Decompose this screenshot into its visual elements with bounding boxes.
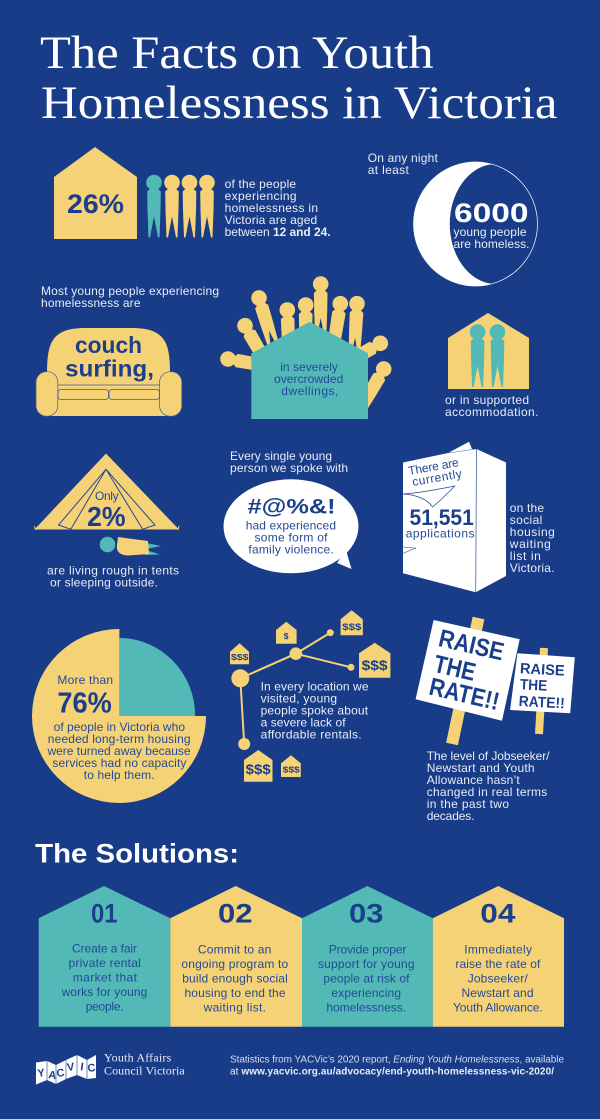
icon: four young people	[146, 175, 215, 238]
text: waiting list: social	[510, 513, 542, 527]
text: supported accommodation	[445, 393, 538, 419]
text: most young people intro: homelessness are	[41, 296, 141, 310]
panel: solution 02: Commit to an	[198, 942, 271, 956]
panel: solution 04: Immediately	[464, 942, 532, 956]
panel: solution 03: support for young	[318, 957, 414, 971]
pie chart: 76 percent turned away: More than	[57, 673, 113, 687]
text: age group: of the people	[225, 177, 296, 191]
text: age group: experiencing	[225, 189, 297, 203]
icon: small house $$$ bottom	[281, 755, 301, 777]
title: The Facts on Youth	[40, 27, 433, 79]
text: every young person: Every single young	[230, 449, 332, 463]
text: 6000 young people: are homeless.	[454, 237, 530, 251]
panel: solution 02: build enough social	[182, 971, 288, 985]
text: waiting list: waiting	[509, 537, 551, 551]
icon: overcrowded house with people	[219, 276, 394, 421]
text: waiting list: Victoria.	[510, 561, 554, 575]
text: jobseeker level: decades.	[427, 809, 474, 823]
icon: couch surfing sofa: couch	[75, 332, 142, 358]
icon: small protest sign: RAISE	[519, 660, 565, 680]
panel: solution 03: 03	[349, 899, 384, 929]
panel: supported accommodation	[445, 313, 538, 419]
icon: tent: Only	[95, 489, 119, 503]
icon: overcrowded house with people: dwellings,	[281, 384, 338, 398]
text: living rough: are living rough in tents	[47, 564, 179, 578]
text: age group: between 12 and 24.	[225, 225, 331, 239]
panel: solution 01: market that	[73, 970, 138, 984]
panel: solution 04: 04	[480, 899, 516, 929]
icon: speech bubble: #@%&!	[248, 496, 336, 518]
logo: YACVic: C	[87, 1062, 96, 1075]
title	[40, 27, 558, 129]
title: Homelessness in Victoria	[41, 77, 558, 129]
panel: solution 02: housing to end the	[184, 986, 286, 1000]
text: every location: affordable rentals.	[261, 728, 362, 742]
icon: speech bubble: had experienced	[246, 518, 336, 532]
panel: solution 02: ongoing program to	[181, 957, 289, 971]
panel: solution 01: people.	[86, 1000, 124, 1014]
icon: overcrowded house with people: in severely	[280, 360, 338, 374]
heading: the solutions: The Solutions:	[35, 838, 239, 868]
icon: application booklet: There are	[407, 455, 460, 478]
panel: family violence	[224, 449, 358, 573]
panel: solution 01: works for young	[61, 985, 147, 999]
icon: application booklet	[402, 442, 506, 592]
text: statistics source: at www.yacvic.org.au/advocacy/end-youth-homelessness-vic-2020/	[230, 1066, 554, 1078]
text: supported accommodation: accommodation.	[445, 405, 538, 419]
icon: large protest sign: RATE!!	[427, 673, 502, 716]
text: living rough	[47, 564, 179, 590]
text: age group: homelessness in	[225, 201, 318, 215]
text: 6000 young people: young people	[454, 225, 527, 239]
logo: YACVic: Council Victoria	[104, 1064, 185, 1078]
text: waiting list: list in	[510, 549, 541, 563]
text: jobseeker level: changed in real terms	[427, 785, 547, 799]
text: statistics source: Statistics from YACVic’s 2020 report, Ending Youth Homelessness, available	[230, 1054, 564, 1066]
icon: application booklet: applications	[406, 526, 474, 540]
icon: small house $$$ bottom: $$$	[283, 765, 300, 775]
icon: large house $$$ right	[359, 643, 390, 678]
logo: YACVic: C	[56, 1067, 65, 1080]
panel: 26 percent statistic	[54, 147, 331, 239]
icon: large protest sign: THE	[431, 650, 478, 687]
icon: tent: 2%	[87, 501, 126, 532]
pie chart: 76 percent turned away: to help them.	[84, 768, 155, 782]
icon: network of locations	[231, 629, 354, 750]
icon: small protest sign: THE	[519, 676, 548, 695]
panel: solution 03: Provide proper	[329, 942, 406, 956]
panel: 2 percent rough sleeping	[34, 454, 179, 590]
panel: solution 01: 01	[91, 899, 118, 929]
logo: YACVic: Y	[37, 1067, 46, 1080]
panel: solution 04: raise the rate of	[455, 957, 541, 971]
logo: YACVic: I	[80, 1061, 84, 1073]
icon: person sleeping outside	[100, 537, 161, 556]
pie chart: 76 percent turned away: of people in Victoria who	[54, 720, 185, 734]
icon: small house $$$ top	[341, 610, 363, 635]
text: on any night	[368, 151, 438, 177]
text: age group: Victoria are aged	[225, 213, 317, 227]
pie chart: 76 percent turned away: needed long-term housing	[48, 732, 191, 746]
text: every location: a severe lack of	[261, 716, 346, 730]
text: jobseeker level: Allowance hasn’t	[427, 773, 520, 787]
text: waiting list	[509, 501, 555, 575]
icon: couch surfing sofa: surfing,	[65, 356, 154, 382]
text: every location: In every location we	[261, 680, 369, 694]
icon: crescent moon	[414, 162, 538, 286]
panel: solution 03: experiencing	[331, 986, 401, 1000]
logo: YACVic: Youth Affairs	[104, 1050, 172, 1064]
text: every location: people spoke about	[261, 704, 369, 718]
text: jobseeker level	[427, 749, 550, 823]
icon: small house $$$ left	[230, 643, 249, 664]
pie chart: 76 percent turned away: services had no capacity	[52, 756, 186, 770]
panel: solution 04	[433, 886, 564, 1027]
panel: solution 02: 02	[218, 899, 253, 929]
icon: large house $$$ right: $$$	[362, 657, 388, 673]
panel: solution 03: people at risk of	[323, 971, 410, 985]
pie chart: 76 percent turned away: were turned away because	[46, 744, 191, 758]
icon: tent	[34, 454, 179, 532]
icon: house with 26%: 26%	[67, 189, 124, 219]
panel: solution 04: Youth Allowance.	[453, 1000, 543, 1014]
panel: solution 01: private rental	[68, 956, 141, 970]
panel: solution 01: Create a fair	[72, 942, 137, 956]
text: every location	[261, 680, 369, 742]
panel: lack of affordable rentals	[230, 610, 390, 782]
pie chart: 76 percent turned away	[32, 629, 206, 803]
logo: YACVic: V	[66, 1061, 76, 1074]
icon: small protest sign: RATE!!	[518, 693, 565, 712]
icon: large house $$$ bottom	[244, 750, 272, 782]
panel: social housing waiting list	[402, 442, 555, 592]
logo: YACVic	[36, 1050, 185, 1084]
text: statistics source	[230, 1054, 564, 1078]
text: every young person	[230, 449, 348, 475]
text: most young people intro	[41, 284, 219, 310]
icon: application booklet: currently	[411, 466, 463, 489]
icon: large protest sign	[416, 618, 520, 744]
text: every young person: person we spoke with	[230, 461, 348, 475]
text: supported accommodation: or in supported	[445, 393, 529, 407]
panel: solution 01	[39, 886, 170, 1027]
icon: small house $: $	[284, 631, 289, 641]
icon: large protest sign: RAISE	[436, 624, 507, 666]
panel: solution 02	[170, 886, 302, 1027]
panel: solution 03: homelessness.	[326, 1000, 406, 1014]
panel: raise the rate	[416, 618, 575, 823]
logo: YACVic: A	[48, 1069, 57, 1082]
text: jobseeker level: in the past two	[427, 797, 509, 811]
text: most young people intro: Most young people experiencing	[41, 284, 219, 298]
text: jobseeker level: The level of Jobseeker/	[427, 749, 550, 763]
panel: solution 04: Newstart and	[462, 986, 534, 1000]
text: jobseeker level: Newstart and Youth	[427, 761, 535, 775]
icon: speech bubble: family violence.	[248, 542, 334, 556]
icon: couch surfing sofa	[36, 328, 182, 416]
icon: house with 26%	[54, 147, 137, 239]
icon: small protest sign	[510, 648, 575, 734]
text: on any night: at least	[368, 163, 409, 177]
panel: 6000 homeless each night	[368, 151, 538, 286]
icon: house with two people	[448, 313, 529, 389]
icon: small house $$$ left: $$$	[231, 652, 249, 662]
panel: solution 04: Jobseeker/	[468, 971, 528, 985]
text: waiting list: on the	[510, 501, 544, 515]
panel: solution 02: waiting list.	[203, 1000, 266, 1014]
text: on any night: On any night	[368, 151, 438, 165]
text: age group	[225, 177, 331, 239]
icon: small house $	[276, 622, 297, 644]
pie chart: 76 percent turned away: 76%	[57, 688, 112, 720]
text: living rough: or sleeping outside.	[50, 576, 158, 590]
icon: large house $$$ bottom: $$$	[246, 761, 271, 777]
icon: speech bubble	[224, 479, 358, 573]
icon: application booklet: 51,551	[410, 505, 474, 530]
icon: small house $$$ top: $$$	[342, 622, 361, 632]
icon: overcrowded house with people: overcrowded	[274, 372, 343, 386]
text: 6000 young people: 6000	[454, 198, 528, 228]
text: every location: visited, young	[261, 692, 337, 706]
panel: solution 03	[302, 886, 433, 1027]
icon: speech bubble: some form of	[254, 530, 328, 544]
text: 6000 young people	[454, 198, 530, 251]
text: waiting list: housing	[510, 525, 555, 539]
